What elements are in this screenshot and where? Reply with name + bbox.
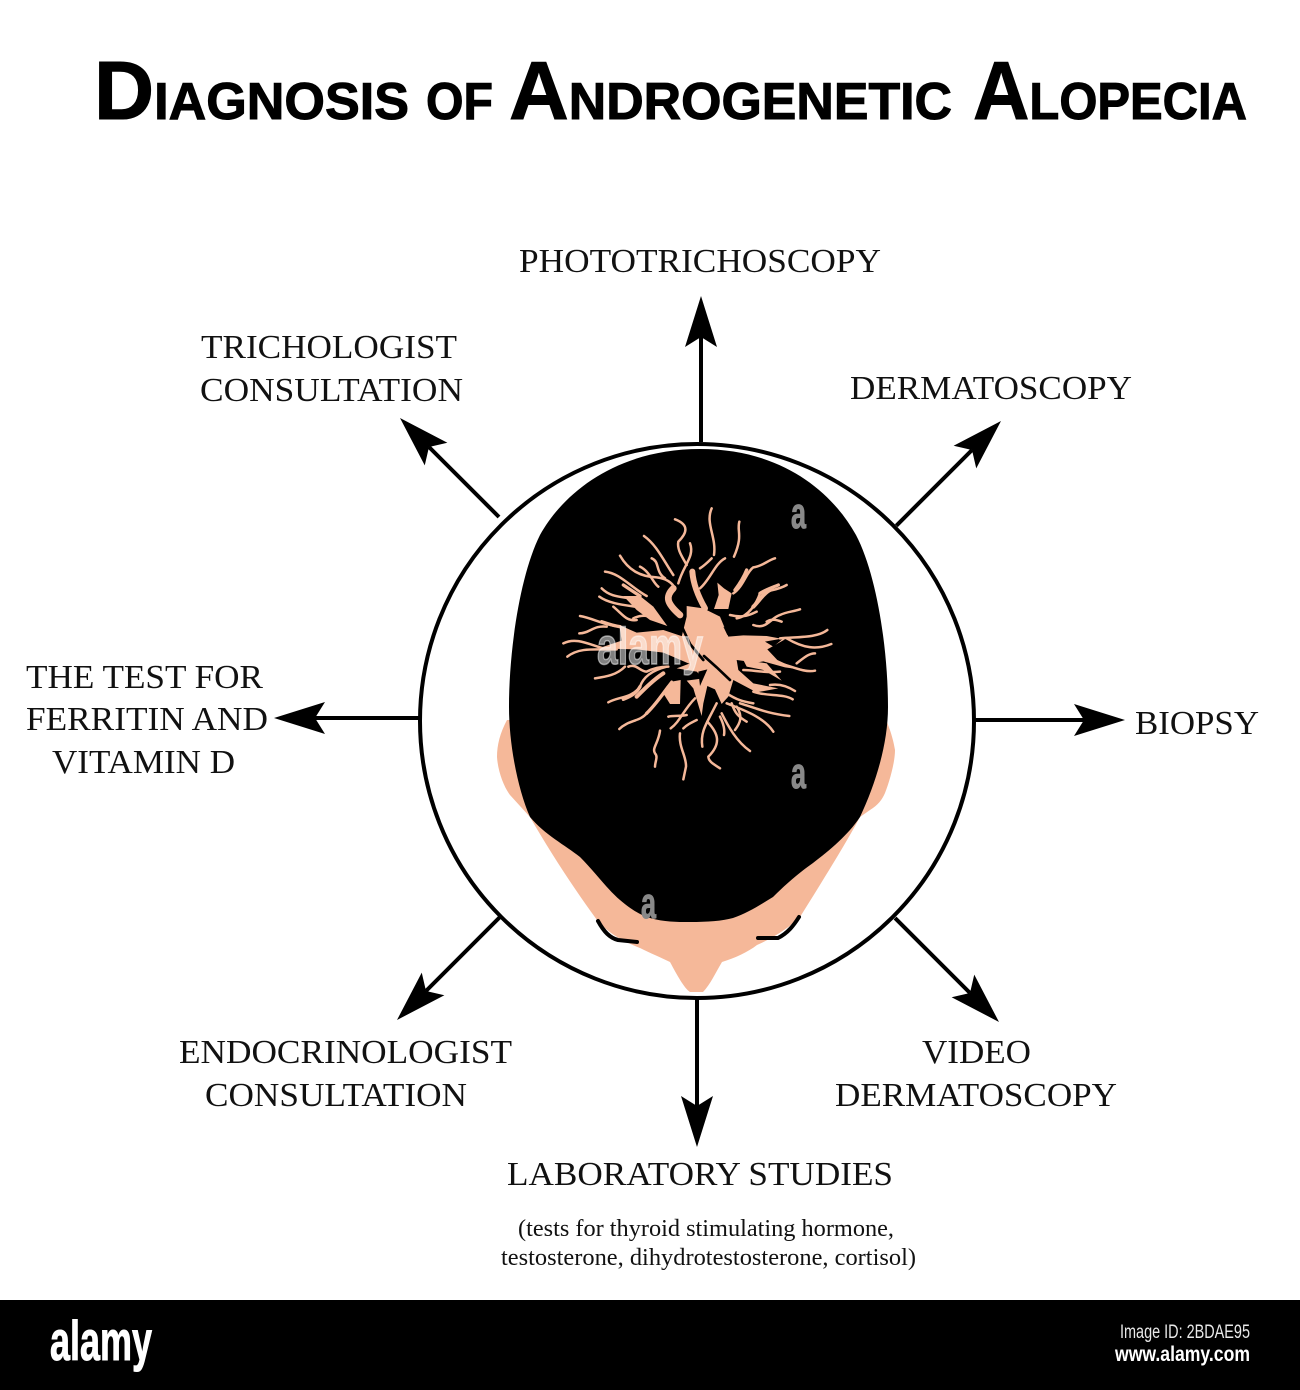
title: DIAGNOSIS (94, 44, 409, 137)
note: laboratory tests list: (tests for thyroid stimulating hormone, (518, 1216, 894, 1242)
left eye line (598, 921, 637, 942)
note: laboratory tests list (501, 1216, 916, 1271)
label: test for ferritin and vitamin D: THE TEST FOR (26, 659, 263, 696)
watermark: center logo: alamy (597, 618, 703, 676)
hair (509, 449, 888, 922)
diagram circle (420, 444, 974, 998)
watermark: letter bottom: a (641, 879, 656, 928)
watermark: letter lower right: a (791, 749, 806, 798)
note: laboratory tests list: testosterone, dihydrotestosterone, cortisol) (501, 1245, 916, 1271)
title (94, 44, 1247, 137)
label: trichologist consultation (200, 329, 463, 409)
label: endocrinologist consultation: ENDOCRINOLOGIST (179, 1034, 512, 1071)
label: trichologist consultation: TRICHOLOGIST (201, 329, 457, 366)
label: phototrichoscopy: PHOTOTRICHOSCOPY (519, 243, 881, 280)
label: test for ferritin and vitamin D (26, 659, 268, 781)
hair loss patch (563, 508, 831, 779)
label: video dermatoscopy: VIDEO (922, 1034, 1031, 1071)
footer image id: Image ID: 2BDAE95 (1120, 1322, 1250, 1343)
label: test for ferritin and vitamin D: VITAMIN D (52, 744, 235, 781)
title: OF (426, 73, 493, 131)
face and ears skin (497, 720, 895, 992)
arrow: to ferritin and vitamin test (274, 702, 420, 734)
arrow: to dermatoscopy (885, 410, 1012, 537)
arrow: up to phototrichoscopy (685, 296, 717, 442)
label: laboratory studies: LABORATORY STUDIES (507, 1156, 893, 1193)
label: endocrinologist consultation (179, 1034, 512, 1114)
arrow: to biopsy (975, 704, 1125, 736)
footer url: www.alamy.com (1114, 1343, 1250, 1366)
arrow: to trichologist consultation (389, 407, 510, 528)
footer band (0, 1300, 1300, 1390)
label: trichologist consultation: CONSULTATION (200, 372, 463, 409)
arrow: to video dermatoscopy (884, 907, 1010, 1033)
footer logo: alamy (50, 1309, 152, 1372)
label: video dermatoscopy: DERMATOSCOPY (835, 1077, 1117, 1114)
label: dermatoscopy: DERMATOSCOPY (850, 370, 1132, 407)
right eye line (758, 917, 799, 938)
label: test for ferritin and vitamin D: FERRITIN AND (26, 701, 268, 738)
title: ANDROGENETIC (509, 44, 952, 137)
title: ALOPECIA (973, 44, 1247, 137)
arrow: to endocrinologist consultation (386, 905, 512, 1031)
label: endocrinologist consultation: CONSULTATION (205, 1077, 467, 1114)
label: biopsy: BIOPSY (1135, 705, 1259, 742)
label: video dermatoscopy (835, 1034, 1117, 1114)
arrow: down to laboratory studies (681, 998, 713, 1147)
watermark: letter upper right: a (791, 489, 806, 538)
head illustration (497, 449, 895, 992)
